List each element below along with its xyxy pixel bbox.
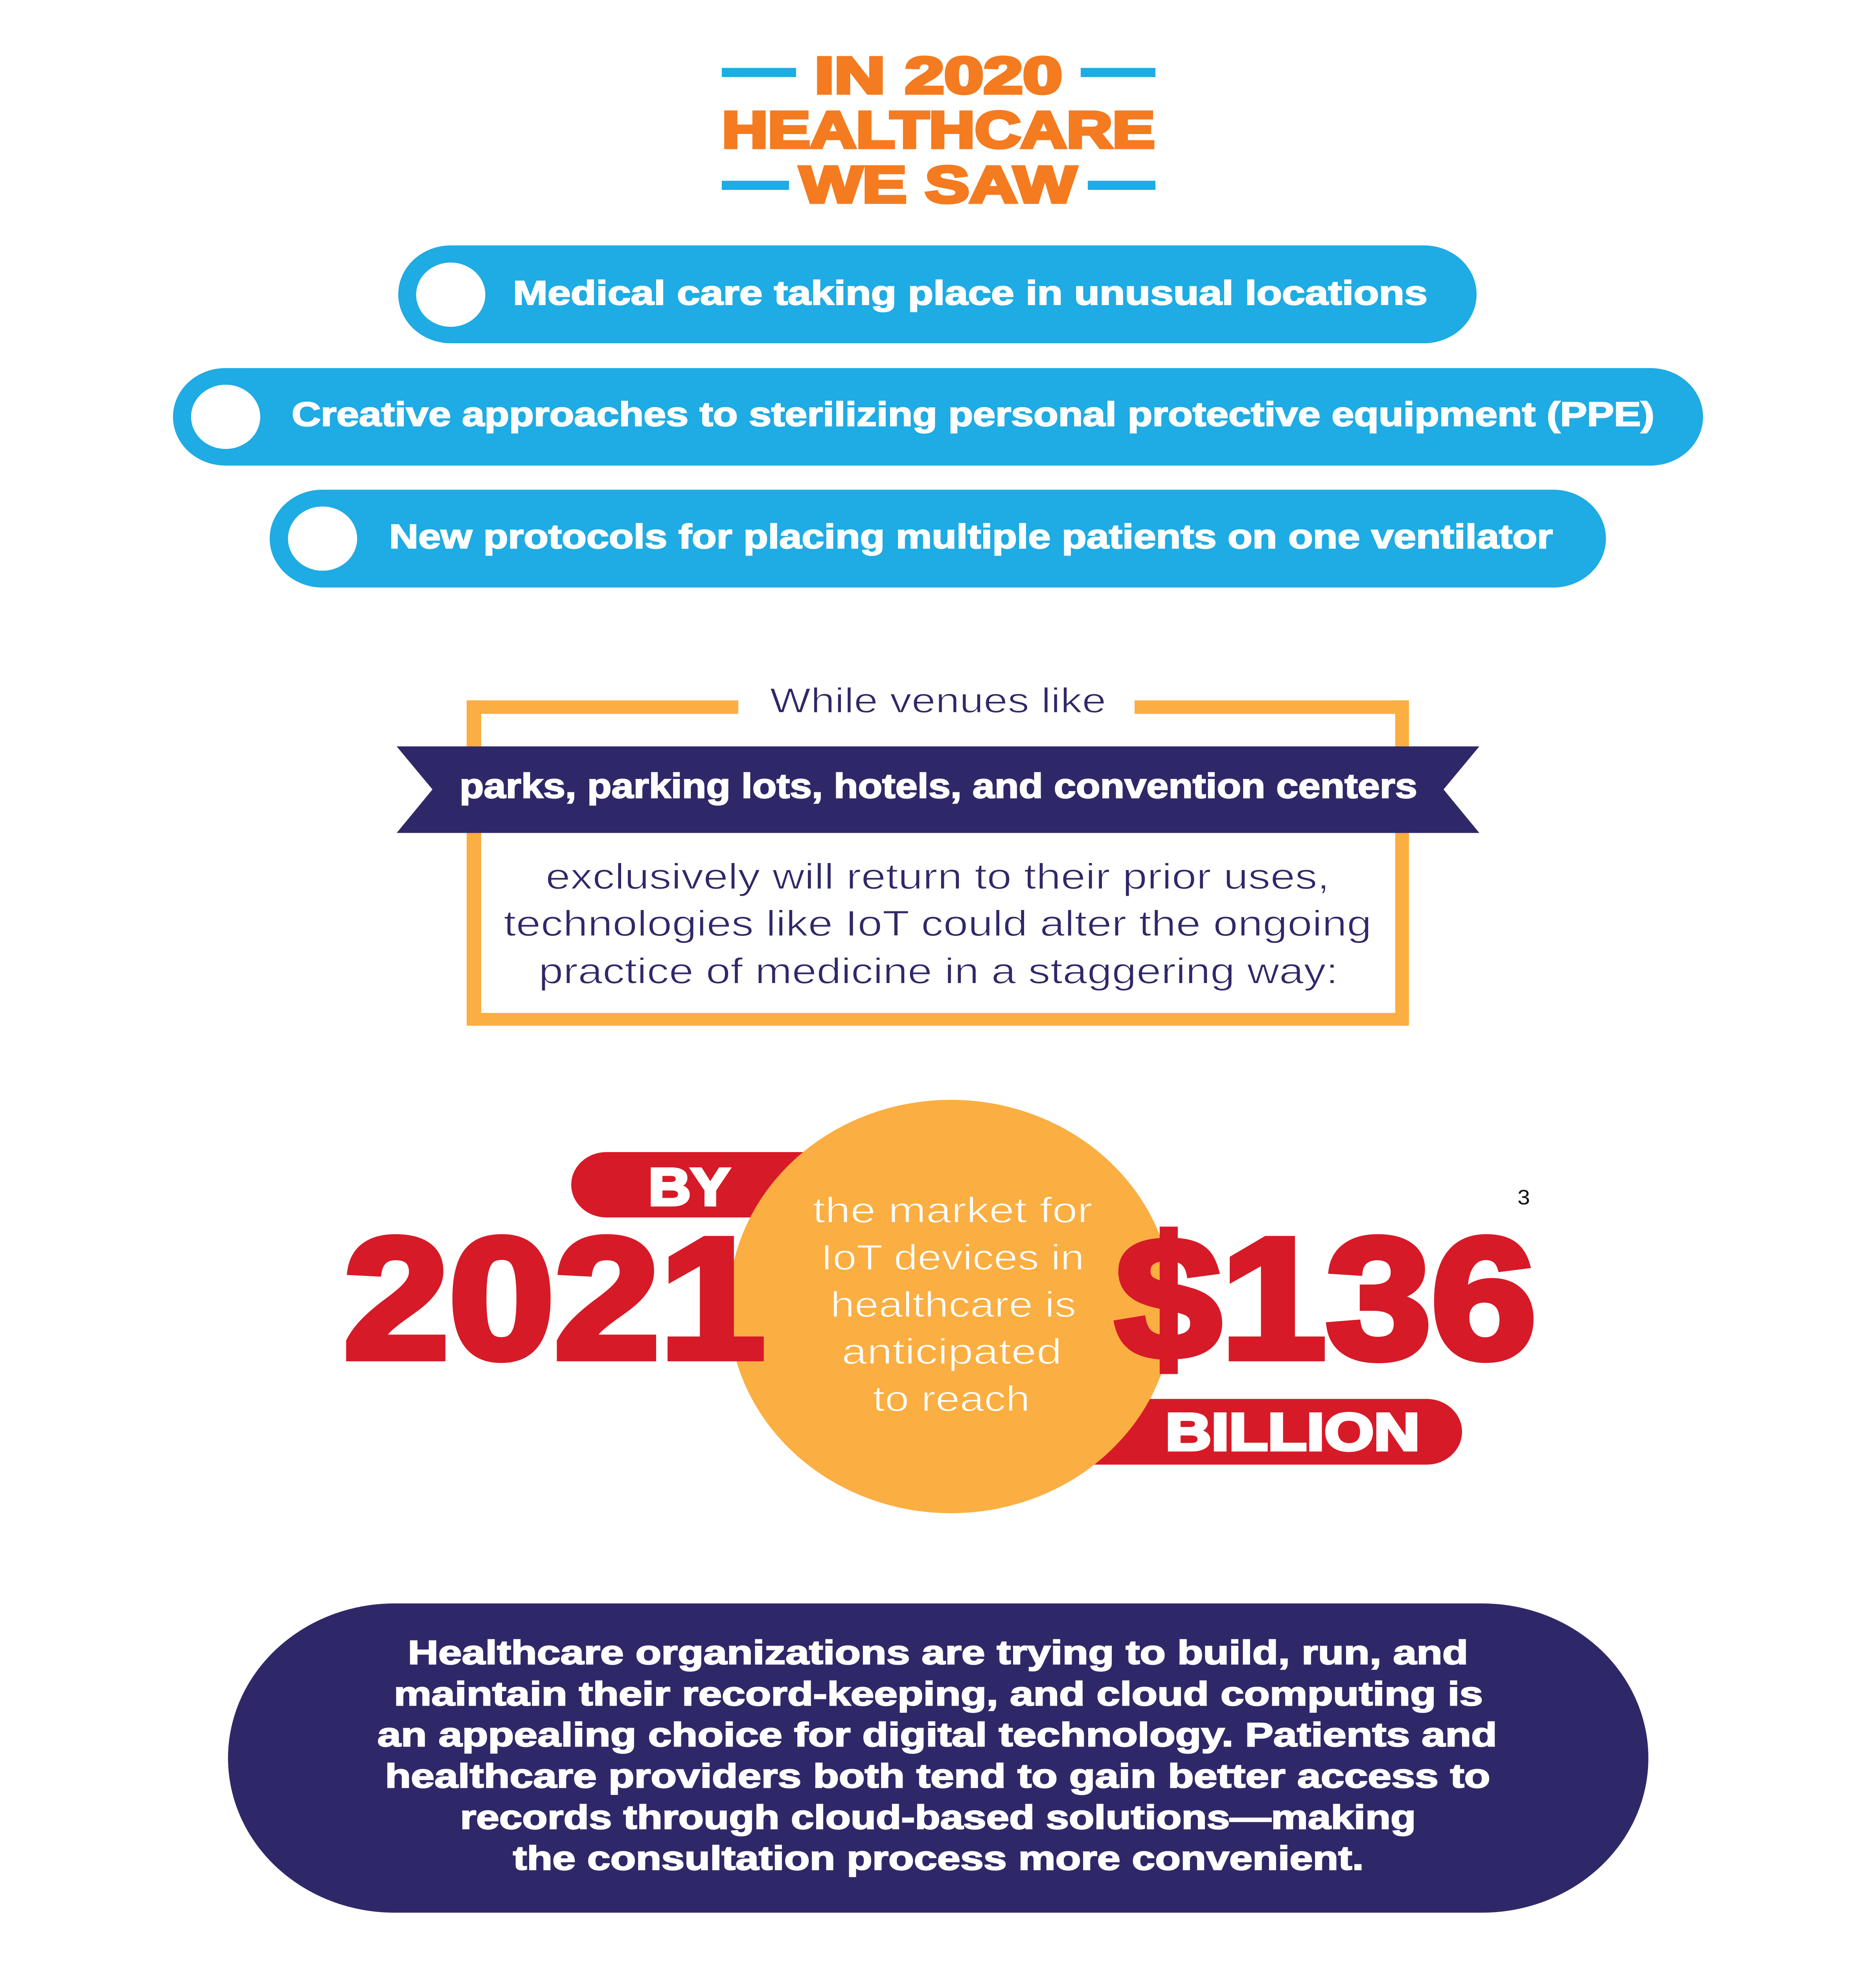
pill text: Medical care taking place in unusual locations <box>513 274 1427 312</box>
panel body text: an appealing choice for digital technology. Patients and <box>377 1716 1497 1753</box>
yellow circle <box>728 1100 1173 1513</box>
dollar number: $136 <box>1116 1202 1536 1394</box>
pill text: Creative approaches to sterilizing personal protective equipment (PPE) <box>292 396 1654 433</box>
icon: white circle <box>191 385 260 449</box>
title <box>722 46 1155 213</box>
circle text: healthcare is <box>830 1285 1076 1325</box>
circle text <box>813 1190 1092 1419</box>
circle text: the market for <box>813 1190 1092 1230</box>
panel: venues <box>397 681 1479 1026</box>
ribbon text: parks, parking lots, hotels, and convention centers <box>460 767 1417 805</box>
icon: white circle <box>416 263 485 327</box>
panel body text <box>377 1634 1497 1877</box>
panel body text: exclusively will return to their prior uses, <box>546 857 1330 897</box>
pill: medical care <box>398 245 1477 343</box>
pill: sterilizing PPE <box>173 368 1703 466</box>
pill: BILLION <box>944 1399 1462 1465</box>
icon: white circle <box>288 506 357 571</box>
circle text: to reach <box>873 1379 1030 1419</box>
panel body text: healthcare providers both tend to gain better access to <box>385 1757 1490 1795</box>
BILLION label: BILLION <box>1165 1403 1420 1462</box>
panel body text: technologies like IoT could alter the ongoing <box>504 904 1372 944</box>
year number: 2021 <box>344 1202 765 1394</box>
panel body text <box>504 857 1372 991</box>
BY label: BY <box>649 1158 730 1217</box>
pill: ventilators <box>270 490 1606 587</box>
panel body text: maintain their record-keeping, and cloud computing is <box>394 1675 1483 1712</box>
footnote marker: 3 <box>1517 1185 1530 1209</box>
title text: HEALTHCARE <box>722 101 1155 158</box>
ribbon banner <box>397 746 1479 833</box>
panel body text: the consultation process more convenient. <box>513 1839 1364 1877</box>
panel body text: records through cloud-based solutions—making <box>460 1798 1416 1836</box>
circle text: anticipated <box>842 1332 1062 1372</box>
panel: cloud computing <box>228 1603 1648 1913</box>
yellow frame <box>467 700 1409 1026</box>
stat: IoT market <box>344 1100 1536 1513</box>
pill: BY <box>571 1152 964 1217</box>
title accent bars <box>722 68 1155 190</box>
pill text: New protocols for placing multiple patients on one ventilator <box>389 518 1553 556</box>
title text <box>722 46 1155 213</box>
circle text: IoT devices in <box>821 1237 1084 1278</box>
intro text: While venues like <box>770 681 1106 720</box>
panel body text: Healthcare organizations are trying to build, run, and <box>408 1634 1468 1671</box>
title text: IN 2020 <box>815 46 1062 104</box>
title text: WE SAW <box>800 156 1077 213</box>
panel body text: practice of medicine in a staggering way: <box>539 951 1338 991</box>
